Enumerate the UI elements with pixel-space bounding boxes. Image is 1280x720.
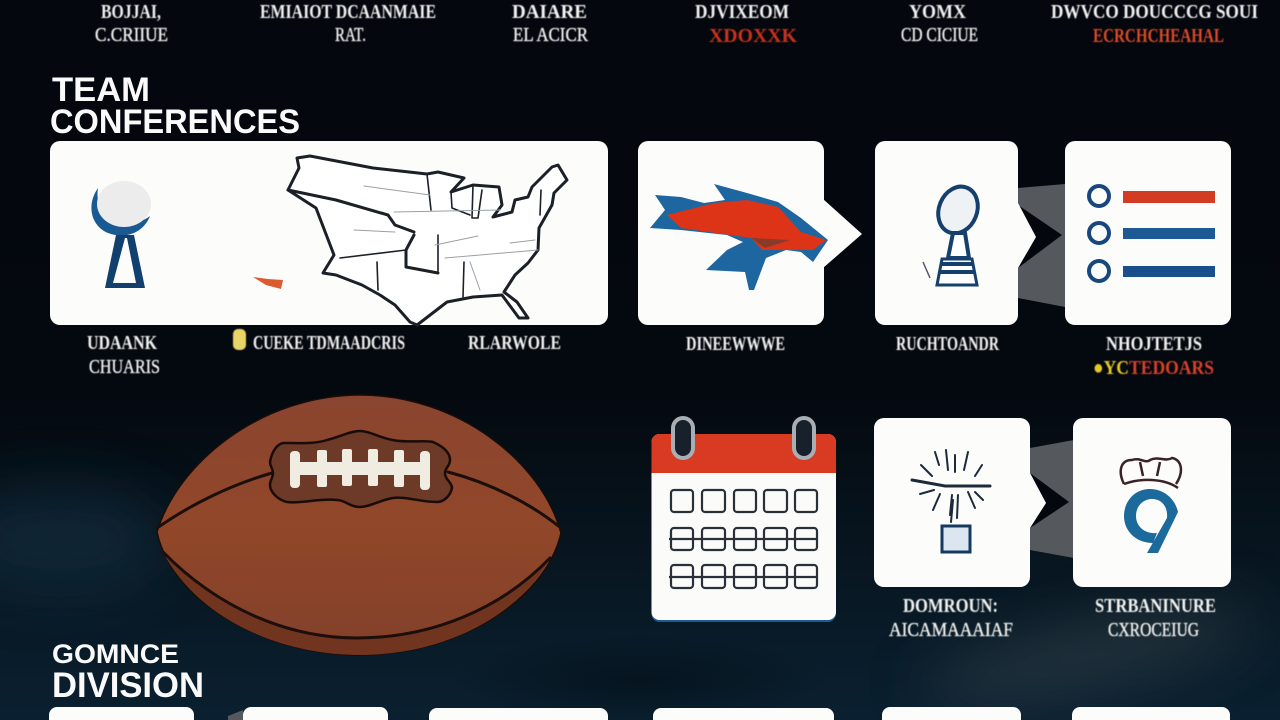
panel: team logo	[638, 141, 828, 325]
top label 1: C.CRIIUE	[95, 24, 168, 46]
icon: crown and nine	[1121, 458, 1181, 553]
top label 3: EL ACICR	[513, 24, 589, 46]
connector: grey band three to four	[1018, 184, 1065, 307]
caption: fireworks	[889, 595, 1013, 641]
icon: lombardi trophy	[923, 181, 985, 285]
caption: fireworks: AICAMAAAIAF	[889, 619, 1013, 641]
top label 1: BOJJAI,	[101, 1, 161, 23]
labels: first row captions	[87, 329, 1214, 379]
caption: right map: RLARWOLE	[468, 332, 561, 354]
heading: team conferences	[50, 71, 300, 141]
calendar grid	[669, 490, 818, 588]
heading: team conferences: TEAM	[52, 71, 150, 109]
heading: gomnce division	[52, 639, 204, 705]
labels: second row captions	[889, 595, 1216, 641]
caption: list	[1093, 333, 1214, 379]
caption: left column	[87, 332, 160, 378]
calendar rings	[671, 416, 816, 460]
icon: fireworks trophy	[912, 450, 990, 552]
top label 3	[512, 1, 589, 46]
panel: conference map	[50, 141, 608, 325]
caption: left column: UDAANK	[87, 332, 157, 354]
panel: trophy	[875, 141, 1036, 325]
caption: crown nine	[1095, 595, 1216, 641]
top label 1	[95, 1, 168, 46]
top label 4	[695, 1, 797, 47]
caption: trophy: RUCHTOANDR	[896, 333, 999, 355]
laces	[290, 449, 430, 490]
top label 3: DAIARE	[512, 1, 587, 23]
top label 2: RAT.	[335, 24, 366, 46]
caption: logo: DINEEWWWE	[686, 333, 785, 355]
top label 5: YOMX	[909, 1, 966, 23]
seams	[157, 472, 561, 638]
top label 5: CD CICIUE	[901, 24, 978, 46]
icon: red marker	[253, 277, 283, 289]
map: united states	[288, 156, 567, 325]
top label 5	[901, 1, 978, 46]
football	[157, 395, 561, 655]
icon: bird logo	[650, 184, 828, 290]
caption: crown nine: STRBANINURE	[1095, 595, 1216, 617]
connector: grey band lower panels	[1030, 440, 1074, 558]
caption: crown nine: CXROCEIUG	[1108, 619, 1199, 641]
caption: list: NHOJTETJS	[1106, 333, 1202, 355]
icon: yellow pill	[233, 329, 246, 350]
top label 2	[260, 1, 436, 46]
panel: standings list	[1065, 141, 1231, 325]
calendar	[652, 416, 836, 622]
top label 6: ECRCHCHEAHAL	[1093, 25, 1224, 47]
caption: left column: CHUARIS	[89, 356, 160, 378]
heading: gomnce division: DIVISION	[52, 666, 204, 705]
top label 4: DJVIXEOM	[695, 1, 789, 23]
panel: fireworks	[874, 418, 1046, 587]
caption: center map: CUEKE TDMAADCRIS	[253, 332, 405, 354]
caption: list: ●YCTEDOARS	[1093, 357, 1214, 379]
arrow: panel two to three	[823, 199, 862, 268]
lace patch	[270, 431, 452, 507]
bottom row of panels	[49, 707, 1230, 720]
heading: gomnce division: GOMNCE	[52, 639, 179, 669]
top label 6	[1051, 1, 1258, 47]
top label 2: EMIAIOT DCAANMAIE	[260, 1, 436, 23]
panel: crown nine	[1073, 418, 1231, 587]
caption: fireworks: DOMROUN:	[903, 595, 998, 617]
top label row	[95, 1, 1258, 47]
top label 4: XDOXXK	[709, 25, 797, 47]
icon: crescent trophy	[91, 181, 151, 288]
icon: list rows	[1089, 186, 1215, 281]
heading: team conferences: CONFERENCES	[50, 103, 300, 141]
